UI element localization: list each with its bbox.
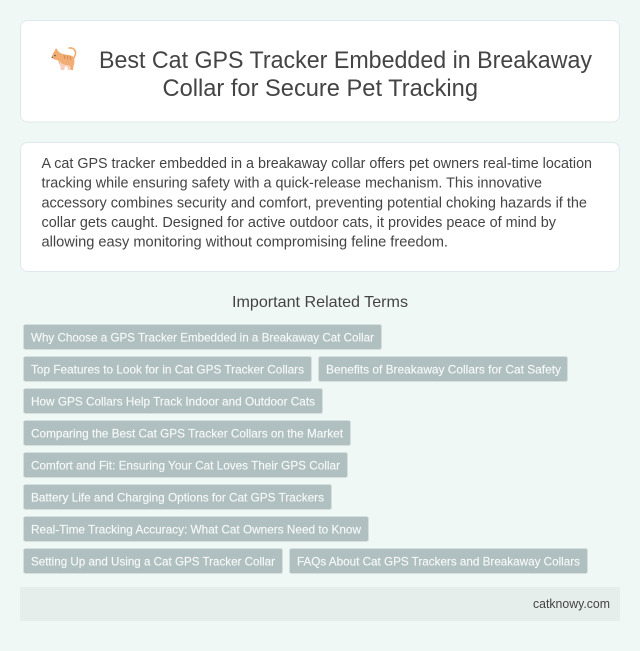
description text: tracking while ensuring safety with a quick-release mechanism. This innovative: [42, 176, 542, 192]
chip 4: [24, 388, 322, 414]
icon: cat: [52, 48, 76, 70]
description text: collar gets caught. Designed for active outdoor cats, it provides peace of mind by: [42, 215, 557, 231]
chip 9: [24, 548, 282, 574]
title: Collar for Secure Pet Tracking: [162, 75, 478, 102]
chip 1: Why Choose a GPS Tracker Embedded in a Breakaway Cat Collar: [31, 330, 374, 344]
chip 9: Setting Up and Using a Cat GPS Tracker Collar: [31, 554, 275, 568]
chip 6: [24, 452, 348, 478]
chip 5: [24, 420, 350, 446]
chip 7: Battery Life and Charging Options for Cat GPS Trackers: [31, 490, 324, 504]
footer: [20, 587, 620, 621]
related term chips: [24, 324, 588, 574]
description text: allowing easy monitoring without compromising feline freedom.: [42, 234, 448, 250]
footer site name: catknowy.com: [533, 596, 610, 611]
chip 8: Real-Time Tracking Accuracy: What Cat Owners Need to Know: [31, 522, 361, 536]
chip 3: [318, 356, 568, 382]
chip 8: [24, 516, 368, 542]
chip 10: FAQs About Cat GPS Trackers and Breakaway Collars: [297, 554, 580, 568]
chip 4: How GPS Collars Help Track Indoor and Outdoor Cats: [31, 394, 315, 408]
chip 3: Benefits of Breakaway Collars for Cat Safety: [326, 362, 561, 376]
panel: title card: [20, 20, 620, 122]
description text: [42, 156, 592, 250]
title: Best Cat GPS Tracker Embedded in Breakaway: [99, 47, 592, 74]
chip 7: [24, 484, 332, 510]
panel: description: [20, 142, 620, 272]
chip 2: Top Features to Look for in Cat GPS Tracker Collars: [31, 362, 304, 376]
chip 6: Comfort and Fit: Ensuring Your Cat Loves Their GPS Collar: [31, 458, 340, 472]
chip 10: [290, 548, 588, 574]
description text: accessory combines security and comfort, preventing potential choking hazards if the: [42, 195, 587, 211]
chip 2: [24, 356, 312, 382]
chip 5: Comparing the Best Cat GPS Tracker Collars on the Market: [31, 426, 344, 440]
description text: A cat GPS tracker embedded in a breakaway collar offers pet owners real-time location: [42, 156, 592, 172]
chip 1: [24, 324, 382, 350]
heading: related terms: Important Related Terms: [232, 294, 408, 311]
title: [99, 47, 592, 102]
